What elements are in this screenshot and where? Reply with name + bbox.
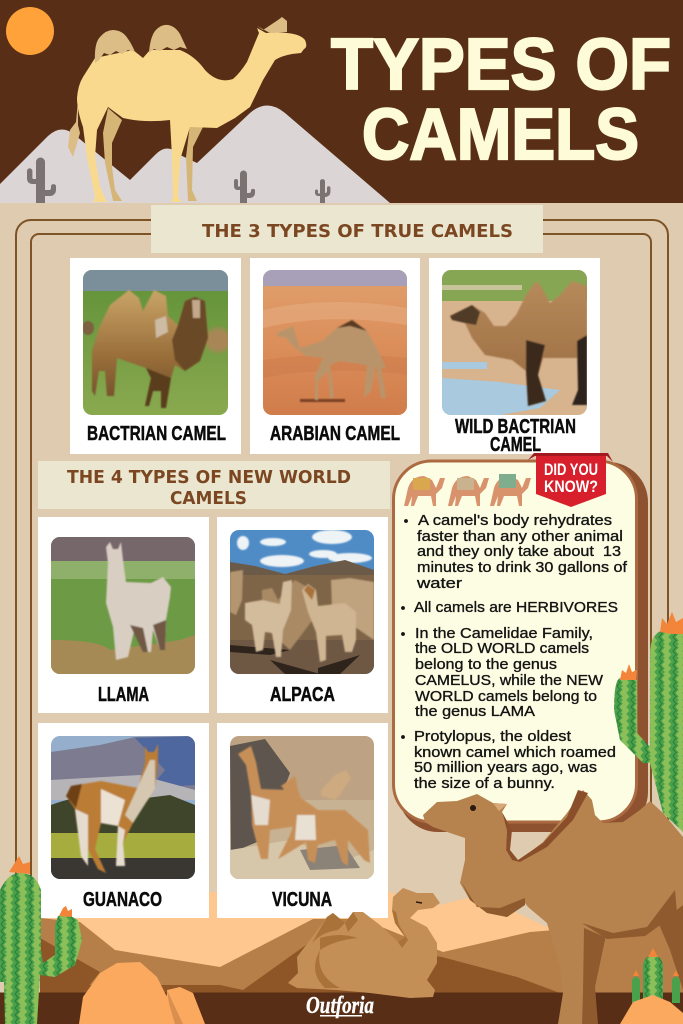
fact: camelidae family: the genus LAMA (415, 703, 535, 720)
fact: protylopus: known camel which roamed (414, 744, 616, 761)
photo: guanaco (51, 736, 195, 879)
icon: camel three (490, 474, 531, 506)
far front leg (580, 925, 606, 1024)
decorative frame (16, 220, 668, 940)
chest shade (462, 883, 525, 917)
fact: rehydration: faster than any other animal (417, 528, 623, 545)
far back leg (655, 900, 683, 990)
card: wild bactrian camel (429, 258, 600, 456)
belly shade (582, 890, 677, 939)
icon: camel one (404, 476, 445, 506)
photo: vicuna (230, 736, 374, 879)
logo: outforia: Outforia (306, 993, 374, 1019)
fact: camelidae family: In the Camelidae Family, (415, 625, 593, 642)
illustration: right cactus (614, 612, 683, 832)
card: alpaca (217, 517, 388, 713)
neck and hump shade (502, 790, 588, 862)
fact: camelidae family: the OLD WORLD camels (415, 640, 589, 657)
fact: rehydration: A camel's body rehydrates (418, 512, 612, 529)
photo: wild bactrian camel (442, 270, 587, 415)
fact: protylopus (401, 728, 616, 792)
icon: grey cactus left (27, 158, 56, 203)
icon: camel two (448, 476, 489, 506)
photo: bactrian camel (82, 270, 231, 415)
icon: grey cactus right (315, 179, 330, 203)
title (331, 25, 671, 175)
illustration: resting camel (288, 888, 440, 998)
body (423, 790, 683, 1024)
camel ear (493, 803, 507, 811)
label: llama: LLAMA (98, 684, 149, 706)
illustration: rocks left (79, 962, 205, 1024)
ribbon: did you know: KNOW? (544, 477, 598, 496)
card: arabian camel (250, 258, 420, 454)
fact: camelidae family: belong to the genus (415, 656, 557, 673)
card: bactrian camel (70, 258, 241, 454)
illustration: bactrian camel silhouette (68, 17, 306, 202)
photo: llama (51, 537, 195, 674)
label: bactrian camel: BACTRIAN CAMEL (87, 423, 226, 445)
panel body (394, 461, 636, 822)
fact: camelidae family (401, 625, 604, 720)
label: alpaca: ALPACA (270, 684, 335, 706)
fact: protylopus: Protylopus, the oldest (414, 728, 572, 745)
fact: rehydration: and they only take about 13 (417, 543, 621, 560)
illustration: left cactus (0, 856, 82, 1024)
card: llama (38, 517, 209, 713)
panel shadow (398, 462, 648, 832)
mountains (0, 106, 390, 203)
ribbon: did you know: DID YOU (544, 460, 598, 479)
fact: rehydration: minutes to drink 30 gallons of (417, 559, 628, 576)
fact: rehydration (404, 512, 628, 592)
photo: arabian camel (263, 270, 407, 415)
icon: sun (6, 7, 54, 55)
label: arabian camel: ARABIAN CAMEL (270, 423, 400, 445)
label: wild bactrian camel: WILD BACTRIAN (455, 416, 576, 438)
fact: protylopus: the size of a bunny. (414, 775, 555, 792)
ribbon: did you know (528, 453, 613, 507)
fact: herbivores: All camels are HERBIVORES (414, 599, 618, 616)
fact: camelidae family: WORLD camels belong to (415, 688, 597, 705)
card: guanaco (38, 723, 209, 918)
illustration: small cactus and rock right (620, 948, 683, 1024)
label: vicuna: VICUNA (272, 889, 332, 911)
banner: 3 types heading: THE 3 TYPES OF TRUE CAMELS (202, 221, 513, 242)
title: CAMELS (362, 95, 639, 175)
label: wild bactrian camel: CAMEL (490, 434, 541, 456)
photo: alpaca (230, 530, 374, 674)
banner: 4 types heading (38, 461, 390, 509)
panel: did you know (394, 453, 648, 832)
illustration: standing camel (423, 790, 683, 1024)
title: TYPES OF (331, 25, 671, 105)
icon: grey cactus middle (234, 170, 255, 203)
fact: camelidae family: CAMELUS, while the NEW (415, 672, 604, 689)
label: guanaco: GUANACO (83, 889, 162, 911)
banner: 4 types heading: CAMELS (170, 488, 247, 509)
banner: 3 types heading (151, 205, 543, 253)
label: wild bactrian camel (455, 416, 576, 456)
camel eye (470, 805, 476, 811)
icon: three caravan camels (404, 474, 531, 506)
ground and dunes (0, 892, 683, 1024)
header band (0, 0, 683, 203)
fact: rehydration: water (416, 575, 462, 592)
banner: 4 types heading: THE 4 TYPES OF NEW WORLD (67, 467, 351, 488)
fact: protylopus: 50 million years ago, was (414, 759, 597, 776)
card: vicuna (217, 723, 388, 918)
